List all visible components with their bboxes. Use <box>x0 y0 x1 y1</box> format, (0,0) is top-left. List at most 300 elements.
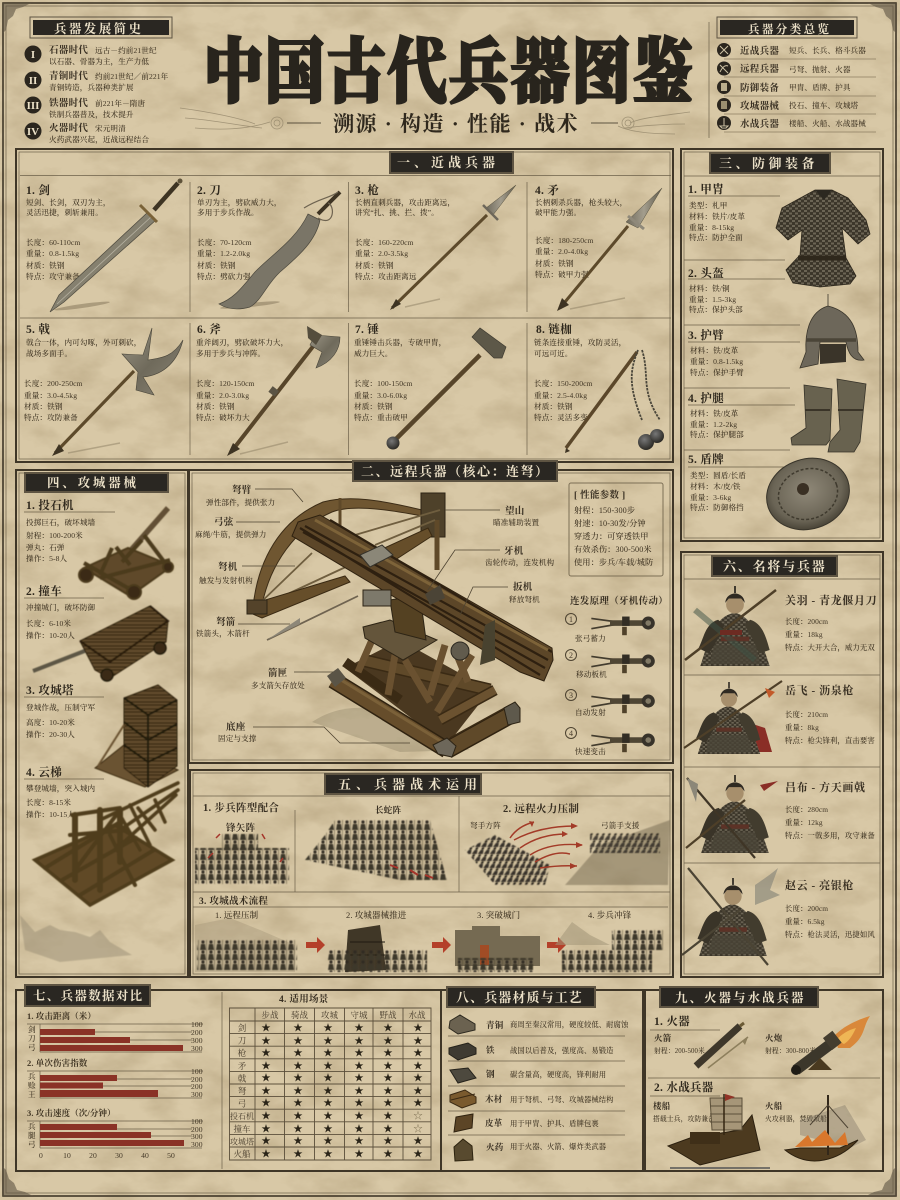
heading: history: 兵器发展简史 <box>54 21 143 36</box>
star rating grid: ★ <box>354 1111 364 1122</box>
performance box: [ 性能参数 ] <box>574 489 625 501</box>
row: wood: 用于弩机、弓弩、攻城器械结构 <box>510 1095 614 1104</box>
star rating grid: ★ <box>383 1098 393 1109</box>
star rating grid: ★ <box>261 1061 271 1072</box>
icon: ram <box>33 606 168 681</box>
row labels <box>230 1023 254 1159</box>
row: iron: 战国以后普及，强度高、易锻造 <box>510 1046 614 1056</box>
timeline: stone age: I <box>31 49 35 61</box>
star rating grid: ★ <box>261 1073 271 1084</box>
general: Yue Fei: 重量：8kg <box>785 723 819 732</box>
figure: Yue Fei <box>684 681 782 754</box>
section: firearms: 1. 火器 <box>654 1015 690 1028</box>
bar chart: attack range: 200 <box>191 1028 203 1037</box>
weapon card: flail <box>534 322 664 453</box>
row labels: 火船 <box>233 1149 251 1159</box>
icon: sword <box>50 178 182 312</box>
star rating grid: ☆ <box>413 1111 423 1122</box>
category: defense <box>717 80 876 96</box>
category: melee: 短兵、长兵、格斗兵器 <box>789 45 866 55</box>
icon: helmet <box>800 294 864 368</box>
item: armor: 特点：防护全面 <box>689 232 743 242</box>
bar chart: attack speed: 30 <box>115 1151 123 1160</box>
item: vambrace: 材料：铁/皮革 <box>690 345 739 355</box>
item: siege tower: 高度：10-20米 <box>26 717 75 727</box>
general: Yue Fei: 长度：210cm <box>785 710 828 719</box>
item: cloud ladder: 攀登城墙，突入城内 <box>26 783 96 794</box>
bolt <box>267 596 358 640</box>
weapon card: saber: 长度：70-120cm <box>197 237 252 247</box>
star rating grid: ★ <box>293 1048 303 1059</box>
label: trigger <box>460 581 540 615</box>
category: naval <box>717 116 876 132</box>
arrows of fire <box>510 821 583 869</box>
icon: spear <box>390 185 516 310</box>
category: melee: 近战兵器 <box>740 45 779 57</box>
label: trigger: 释放弩机 <box>509 594 540 604</box>
weapon card: axe: 重量：2.0-3.0kg <box>196 390 249 400</box>
bar chart: attack speed: 3. 攻击速度（次/分钟） <box>27 1108 116 1118</box>
bar chart: attack speed: 0 <box>39 1151 43 1160</box>
decoration: mountains <box>20 915 132 962</box>
bar chart: attack speed: 兵 <box>28 1121 36 1131</box>
item: battering ram: 长度：6-10米 <box>26 618 71 628</box>
panel 4: siege engines <box>16 470 188 977</box>
bar chart: attack range: 刀 <box>28 1034 36 1043</box>
star rating grid: ★ <box>354 1124 364 1135</box>
header block <box>24 17 876 145</box>
weapon card: halberd <box>24 322 183 456</box>
icon: tower ship <box>668 1094 770 1168</box>
siege flow: 3. 攻城战术流程 <box>199 895 268 907</box>
section: naval: 楼船 <box>653 1101 671 1111</box>
step: break gate: 3. 突破城门 <box>477 910 520 920</box>
star rating grid: ★ <box>261 1048 271 1059</box>
general: Zhao Yun <box>682 868 875 965</box>
step: charge <box>555 910 664 972</box>
weapon card: sword <box>26 178 182 312</box>
panel 2: ranged weapons <box>189 461 673 763</box>
star rating grid: ★ <box>413 1048 423 1059</box>
arrow <box>547 937 566 953</box>
weapon card: saber: 多用于步兵作战。 <box>197 207 259 217</box>
icon: halberd <box>52 328 183 456</box>
rear arm <box>248 576 350 618</box>
item: greaves <box>688 379 866 452</box>
general: Lu Bu <box>686 775 875 858</box>
general: Zhao Yun: 特点：枪法灵活，迅捷如风 <box>785 930 875 940</box>
step 1: 张弓蓄力 <box>575 633 606 643</box>
general: Guan Yu: 长度：200cm <box>785 617 828 626</box>
panel 6: famous generals <box>681 552 883 977</box>
item: battering ram <box>24 584 168 681</box>
category: siege: 投石、撞车、攻城塔 <box>789 100 859 110</box>
weapon card: lance: 4. 矛 <box>535 184 559 197</box>
star rating grid: ★ <box>383 1023 393 1034</box>
label: base: 底座 <box>226 721 246 733</box>
weapon card: hammer: 长度：100-150cm <box>354 378 413 388</box>
heading: materials: 八、兵器材质与工艺 <box>456 990 583 1005</box>
icon: axe <box>227 326 340 456</box>
weapon card: sword: 材质：铁钢 <box>26 260 65 270</box>
weapon card: lance <box>535 184 662 311</box>
weapon card: flail: 链条连接重锤，攻防灵活， <box>534 337 626 348</box>
icon: fire ship <box>785 1095 866 1161</box>
star rating grid: ★ <box>383 1136 393 1147</box>
item: greaves: 4. 护腿 <box>688 391 724 405</box>
star rating grid: ★ <box>293 1036 303 1047</box>
star rating grid: ★ <box>383 1086 393 1097</box>
icon: hammer <box>386 328 506 450</box>
row: wood <box>450 1090 614 1108</box>
heading: firearms and naval: 九、火器与水战兵器 <box>675 990 806 1005</box>
crowd: crossbowmen <box>465 835 550 885</box>
performance box: 射程：150-300步 <box>574 505 635 515</box>
row labels: 撞车 <box>233 1124 251 1134</box>
item: shield <box>688 448 859 540</box>
icon: armor <box>776 190 870 287</box>
star rating grid: ★ <box>293 1124 303 1135</box>
bar chart: attack speed: 300 <box>191 1140 203 1149</box>
general: Lu Bu: 吕布 - 方天画戟 <box>785 780 866 794</box>
label: magazine: 多支箭矢存放处 <box>251 680 305 690</box>
item: shield: 特点：防御格挡 <box>690 502 744 512</box>
base interior <box>345 640 490 745</box>
star rating grid: ★ <box>413 1098 423 1109</box>
bowstrings <box>258 510 440 605</box>
bar chart: damage index: 200 <box>191 1075 203 1084</box>
label: base: 固定与支撑 <box>218 733 257 743</box>
row labels: 投石机 <box>230 1111 254 1121</box>
step 1: 1 <box>569 615 573 624</box>
timeline: iron age: III <box>27 100 39 112</box>
category: ranged <box>717 62 876 77</box>
timeline: bronze age: II <box>29 75 37 87</box>
weapon card: spear <box>355 183 516 310</box>
category: melee <box>717 43 876 59</box>
weapon card: lance: 重量：2.0-4.0kg <box>535 246 588 256</box>
weapon card: axe: 长度：120-150cm <box>196 378 255 388</box>
title: 中国古代兵器图鉴 <box>204 35 694 111</box>
item: cloud ladder <box>24 765 178 905</box>
bar chart: attack range <box>27 1011 203 1053</box>
timeline: gunpowder age: IV <box>27 126 39 138</box>
star rating grid: ★ <box>261 1149 271 1160</box>
step 3: 3 <box>569 691 573 700</box>
star rating grid: ★ <box>323 1098 333 1109</box>
timeline: stone age: 远古－约前21世纪 <box>95 45 157 55</box>
icon: fire lance <box>696 1023 748 1068</box>
icon: flail <box>565 350 664 453</box>
label: trigger box <box>199 561 295 585</box>
item: trebuchet: 投掷巨石，破坏城墙 <box>26 517 96 528</box>
general: Yue Fei: 岳飞 - 沥泉枪 <box>785 683 854 697</box>
item: helmet: 重量：1.5-3kg <box>689 294 736 304</box>
bar chart: damage index <box>27 1058 203 1099</box>
bar chart: attack speed: 腿 <box>28 1131 36 1140</box>
item: trebuchet: 射程：100-200米 <box>26 530 83 540</box>
item: vambrace: 3. 护臂 <box>688 328 724 342</box>
weapon card: flail: 特点：灵活多变 <box>534 412 588 422</box>
weapon card: flail: 材质：铁钢 <box>534 401 573 411</box>
bar chart: attack range: 100 <box>191 1020 203 1029</box>
heading: generals <box>712 556 837 576</box>
label: bow arm: 弹性部件，提供张力 <box>206 497 275 508</box>
infantry formations: 1. 步兵阵型配合 <box>203 801 279 814</box>
timeline: gunpowder age: 火器时代 <box>49 122 88 134</box>
table: suitable scenarios <box>230 993 431 1160</box>
section: firearms <box>650 1015 870 1075</box>
star rating grid: ★ <box>383 1048 393 1059</box>
weapon card: hammer: 威力巨大。 <box>354 348 392 358</box>
weapon card: axe: 材质：铁钢 <box>196 401 235 411</box>
step: suppress <box>195 910 297 972</box>
timeline: bronze age: 青铜铸造，兵器种类扩展 <box>49 82 134 93</box>
item: helmet: 特点：保护头部 <box>689 304 743 314</box>
general: Guan Yu <box>685 586 877 666</box>
mount block <box>363 620 437 660</box>
timeline: gunpowder age: 火药武器兴起，近战远程结合 <box>49 134 149 145</box>
item: trebuchet: 操作：5-8人 <box>26 553 68 563</box>
timeline: stone age: 石器时代 <box>49 44 88 56</box>
step: charge: 4. 步兵冲锋 <box>588 910 632 920</box>
legs <box>358 640 472 712</box>
general: Guan Yu: 重量：18kg <box>785 630 823 639</box>
weapon card: hammer <box>354 322 506 450</box>
star rating grid: ★ <box>354 1023 364 1034</box>
weapon card: flail: 可远可近。 <box>534 348 572 358</box>
row: steel <box>450 1068 606 1083</box>
trigger cluster <box>363 590 391 606</box>
item: siege tower <box>24 683 178 787</box>
item: shield: 重量：3-6kg <box>690 492 731 502</box>
star rating grid: ★ <box>323 1061 333 1072</box>
decoration: left cloud scroll <box>180 108 321 129</box>
icon: trebuchet <box>79 508 173 599</box>
weapon card: flail: 8. 链枷 <box>536 322 572 336</box>
bar chart: attack speed: 10 <box>63 1151 71 1160</box>
panel: history of weapons <box>24 17 172 145</box>
section: firearms: 火炮 <box>765 1033 783 1043</box>
weapon card: hammer: 重量：3.0-6.0kg <box>354 390 407 400</box>
heading: generals: 六、名将与兵器 <box>723 559 827 574</box>
panel 1: melee weapons <box>16 149 673 462</box>
heading: data comparison: 七、兵器数据对比 <box>33 988 143 1003</box>
weapon card: lance: 长度：180-250cm <box>535 235 594 245</box>
weapon card: flail: 长度：150-200cm <box>534 378 593 388</box>
category: ranged: 远程兵器 <box>740 63 779 75</box>
label: trigger box: 弩机 <box>218 561 238 573</box>
item: vambrace: 特点：保护手臂 <box>690 367 744 377</box>
header row: 步战 <box>261 1010 279 1020</box>
item: siege tower: 操作：20-30人 <box>26 729 75 739</box>
row labels: 攻城塔 <box>230 1136 254 1146</box>
weapon card: halberd: 5. 戟 <box>26 322 50 336</box>
star rating grid: ★ <box>354 1073 364 1084</box>
row: bronze: 商周至秦汉常用，硬度较低、耐腐蚀 <box>510 1020 629 1030</box>
weapon card: spear: 特点：攻击距离远 <box>355 271 417 281</box>
icon: lance <box>557 188 662 311</box>
ranged fire: 弩手方阵 <box>470 820 501 830</box>
general: Guan Yu: 特点：大开大合，威力无双 <box>785 643 875 653</box>
star rating grid: ★ <box>383 1149 393 1160</box>
star rating grid: ★ <box>293 1098 303 1109</box>
star rating grid: ★ <box>323 1023 333 1034</box>
heading: tactics <box>325 774 482 794</box>
heading: siege: 四、攻城器械 <box>47 475 139 490</box>
star rating grid: ★ <box>293 1061 303 1072</box>
icon: cannon with flames <box>791 1016 870 1075</box>
star rating grid: ★ <box>354 1149 364 1160</box>
weapon card: sword: 重量：0.8-1.5kg <box>26 248 79 258</box>
star rating grid: ★ <box>354 1061 364 1072</box>
weapon card: spear: 重量：2.0-3.5kg <box>355 248 408 258</box>
arrow <box>432 937 451 953</box>
weapon card: halberd: 长度：200-250cm <box>24 378 83 388</box>
figure: Guan Yu <box>685 586 776 666</box>
row: gunpowder: 用于火器、火箭、爆炸类武器 <box>510 1142 607 1151</box>
table: suitable scenarios: 4. 适用场景 <box>279 993 329 1005</box>
bow head <box>421 493 445 537</box>
category: siege: 攻城器械 <box>740 100 779 112</box>
label: trigger: 扳机 <box>513 581 533 593</box>
panel 9: firearms and naval <box>645 987 883 1171</box>
label: arrow: 弩箭 <box>216 616 236 628</box>
section: naval: 火船 <box>765 1101 783 1111</box>
weapon card: axe <box>196 322 340 456</box>
section: firearms: 火箭 <box>654 1033 672 1043</box>
row labels: 弩 <box>238 1086 247 1096</box>
label: sight: 瞄准辅助装置 <box>493 517 539 527</box>
label: magazine: 箭匣 <box>268 667 288 679</box>
star rating grid: ★ <box>383 1124 393 1135</box>
icon: siege tower <box>95 685 178 787</box>
header row: 水战 <box>408 1010 426 1020</box>
timeline: gunpowder age <box>24 122 149 145</box>
row labels: 矛 <box>238 1061 247 1071</box>
item: shield: 类型：圆盾/长盾 <box>690 470 746 480</box>
ranged fire: 2. 远程火力压制 <box>503 802 579 815</box>
item: helmet: 材料：铁/铜 <box>689 283 730 293</box>
item: battering ram: 2. 撞车 <box>26 584 62 598</box>
heading: melee: 一、近战兵器 <box>397 155 499 170</box>
item: greaves: 特点：保护腿部 <box>690 429 744 439</box>
infantry formations <box>195 801 447 884</box>
weapon card: hammer: 特点：重击破甲 <box>354 412 408 422</box>
star rating grid: ☆ <box>413 1124 423 1135</box>
heading: materials <box>447 987 595 1007</box>
item: helmet: 2. 头盔 <box>688 266 724 280</box>
star rating grid: ★ <box>261 1098 271 1109</box>
weapon card: spear: 长度：160-220cm <box>355 237 414 247</box>
step 3 <box>566 690 655 717</box>
weapon card: sword: 灵活迅捷，刺斩兼用。 <box>26 207 103 218</box>
weapon card: halberd: 材质：铁钢 <box>24 401 63 411</box>
row labels: 枪 <box>238 1048 247 1058</box>
item: siege tower: 登城作战，压制守军 <box>26 702 96 713</box>
heading: firearms and naval <box>660 987 818 1007</box>
item: armor: 1. 甲胄 <box>688 182 724 196</box>
star rating grid: ★ <box>383 1036 393 1047</box>
star rating grid: ★ <box>293 1149 303 1160</box>
ranged fire: 弓箭手支援 <box>601 820 640 830</box>
section: naval <box>650 1080 866 1168</box>
star rating grid: ★ <box>261 1124 271 1135</box>
general: Guan Yu: 关羽 - 青龙偃月刀 <box>785 593 877 607</box>
timeline: bronze age: 青铜时代 <box>49 70 88 82</box>
star rating grid: ★ <box>261 1023 271 1034</box>
timeline: stone age: 以石器、骨器为主，生产力低 <box>49 56 149 67</box>
rail top highlight <box>315 520 548 650</box>
row: bronze <box>449 1015 629 1034</box>
row: leather: 皮革 <box>485 1118 503 1128</box>
star rating grid: ★ <box>354 1036 364 1047</box>
heading: data comparison <box>25 985 150 1006</box>
item: greaves: 重量：1.2-2kg <box>690 419 737 429</box>
weapon card: spear: 长柄直刺兵器，攻击距离远， <box>355 197 455 208</box>
bar chart: damage index: 300 <box>191 1090 203 1099</box>
weapon card: sword: 1. 剑 <box>26 183 50 197</box>
label: sight <box>445 505 539 527</box>
star rating grid: ★ <box>293 1023 303 1034</box>
label: trigger box: 触发与发射机构 <box>199 575 253 585</box>
bow arm <box>253 499 422 607</box>
timeline: iron age: 前221年－隋唐 <box>95 98 145 108</box>
category: siege <box>717 98 876 114</box>
star rating grid: ★ <box>323 1086 333 1097</box>
base frame <box>345 660 495 720</box>
item: shield: 材料：木/皮/铁 <box>690 481 741 491</box>
star rating grid: ★ <box>323 1073 333 1084</box>
bar chart: attack range: 300 <box>191 1036 203 1045</box>
weapon card: saber: 特点：劈砍力强 <box>197 271 251 281</box>
header row: 野战 <box>379 1010 397 1020</box>
timeline: stone age <box>24 44 157 67</box>
row labels: 弓 <box>238 1099 246 1109</box>
heading: defense: 三、防御装备 <box>719 156 818 171</box>
item: armor: 材料：铁片/皮革 <box>689 211 745 221</box>
icon: cloud ladder <box>35 783 178 905</box>
star rating grid: ★ <box>323 1036 333 1047</box>
label: bowstring: 麻绳/牛筋，提供弹力 <box>195 529 266 540</box>
star rating grid: ★ <box>323 1124 333 1135</box>
step: siege advance <box>327 910 427 972</box>
icon: shield <box>757 448 859 540</box>
arrow <box>306 937 325 953</box>
weapon card: saber: 单刃为主，劈砍威力大， <box>197 197 282 208</box>
bar chart: damage index: 兵 <box>28 1071 36 1081</box>
weapon card: halberd: 特点：攻防兼备 <box>24 412 78 422</box>
step: break gate <box>455 910 540 972</box>
step: suppress: 1. 远程压制 <box>215 910 259 920</box>
decoration: right cloud scroll <box>591 112 690 134</box>
performance box <box>569 483 663 576</box>
step 1 <box>566 614 655 643</box>
siege flow <box>195 895 664 972</box>
performance box: 使用：步兵/车载/城防 <box>574 557 653 567</box>
row: leather <box>454 1114 599 1132</box>
row: bronze: 青铜 <box>486 1020 504 1030</box>
weapon card: hammer: 重锤锤击兵器，专破甲胄， <box>354 337 446 348</box>
star rating grid: ★ <box>323 1136 333 1147</box>
item: greaves: 材料：铁/皮革 <box>690 408 739 418</box>
panel 5: tactics <box>190 770 673 977</box>
heading: history <box>30 17 172 38</box>
star rating grid: ★ <box>413 1023 423 1034</box>
header row: 攻城 <box>321 1010 338 1020</box>
section: naval: 搭载士兵，攻防兼备 <box>653 1114 715 1124</box>
row: steel: 碳含量高，硬度高，锋利耐用 <box>510 1070 606 1080</box>
